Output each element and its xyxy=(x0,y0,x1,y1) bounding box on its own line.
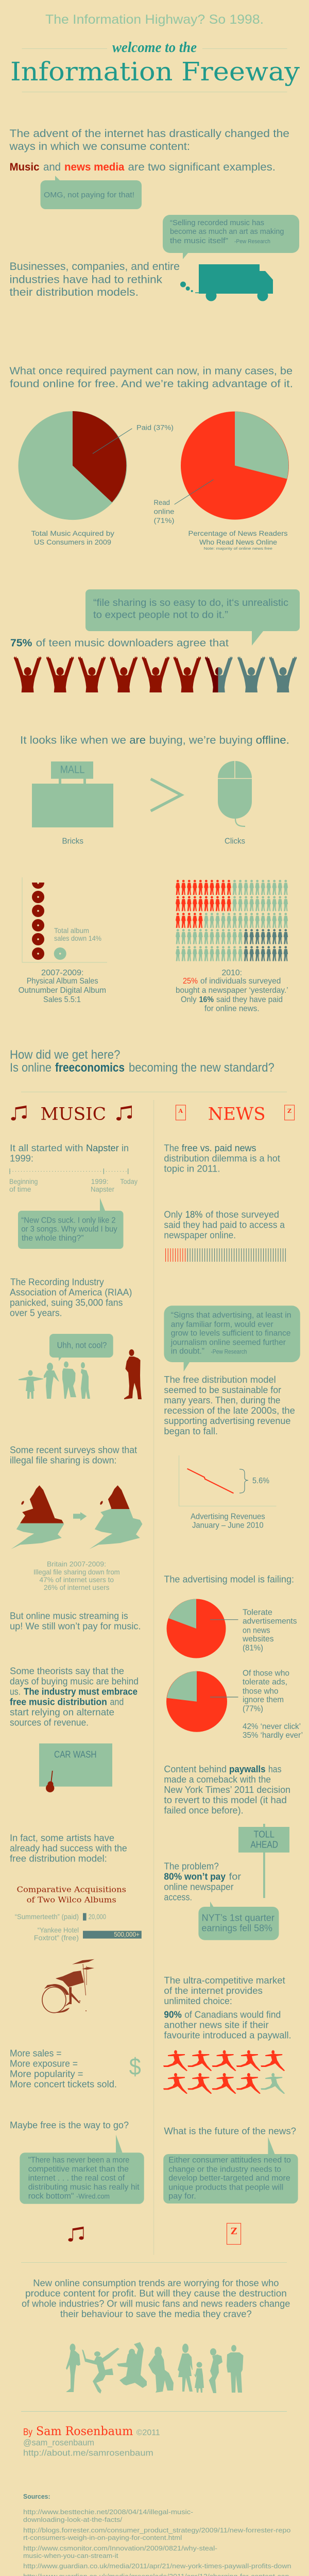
text: RIAA xyxy=(10,1277,132,1318)
icon: mouse (clicks) xyxy=(218,761,252,846)
title block: Information Freeway xyxy=(10,57,300,87)
chart: album sales discs: sales down 14% xyxy=(54,934,101,942)
pie chart: tolerate ads: websites xyxy=(242,1635,274,1643)
text: intro: are two significant examples. xyxy=(128,161,276,173)
text: intro xyxy=(9,128,289,173)
text: theorists: sources of revenue. xyxy=(10,1717,89,1727)
heading: MUSIC xyxy=(11,1104,132,1124)
text: streaming is up: up! We still won’t pay for music. xyxy=(10,1621,141,1631)
pictogram: 75% raised-hands people xyxy=(14,656,297,692)
text: 90% of Canadians: favourite introduced a paywall. xyxy=(164,2030,291,2041)
speech bubble: maybe free xyxy=(10,2120,144,2204)
text: streaming is up: But online music streaming is xyxy=(10,1611,128,1621)
text: file sharing is down: illegal file sharing is down: xyxy=(10,1455,116,1466)
text: more sales: More popularity = xyxy=(10,2069,83,2079)
sources list: http://www.besttechie.net/2008/04/14/illegal-music- xyxy=(23,2509,193,2516)
text: 75% of teens: 75% xyxy=(10,638,32,649)
pie chart: total music acquired: Paid (37%) xyxy=(136,423,174,431)
text: closing question: New online consumption trends are worrying for those who xyxy=(33,2278,279,2288)
kicker: The Information Highway: The Information Highway? So 1998. xyxy=(45,12,264,27)
text: more sales: More exposure = xyxy=(10,2059,78,2069)
text: only 18%: of those surveyed xyxy=(205,1209,279,1219)
caption: 2007-2009 album sales: Sales 5.5:1 xyxy=(43,995,81,1004)
text: artists free distribution xyxy=(10,1833,127,1863)
caption: 2010 newspaper survey: 16% xyxy=(199,995,214,1004)
timeline: beginning of time to today: Napster xyxy=(91,1185,114,1193)
text: Napster: It all started with xyxy=(10,1143,83,1153)
speech bubble: maybe free: distributing music has really hit xyxy=(28,2183,140,2192)
text: theorists: and xyxy=(110,1697,124,1707)
text: buying offline: It looks like when we xyxy=(20,735,126,746)
illustration: toll ahead sign: AHEAD xyxy=(250,1840,278,1850)
text: only 18%: Only xyxy=(164,1209,182,1219)
pie chart: ignore ads: 42% ‘never click’ xyxy=(243,1722,301,1731)
text: businesses: Businesses, companies, and entire xyxy=(9,261,180,273)
text: RIAA: The Recording Industry xyxy=(10,1277,104,1287)
text: paywalls: failed once before). xyxy=(164,1805,244,1816)
text: artists free distribution: free distribution model: xyxy=(10,1853,107,1863)
text: free vs paid: The xyxy=(164,1143,179,1153)
text: more sales: More sales = xyxy=(10,2048,61,2059)
text: intro: Music xyxy=(9,161,40,173)
text: Napster: 1999: xyxy=(10,1153,33,1163)
chart: album sales discs xyxy=(22,876,107,962)
speech bubble: NYT earnings: earnings fell 58% xyxy=(202,1923,272,1933)
illustration: toll ahead sign: TOLL xyxy=(253,1829,274,1840)
caption: 2010 newspaper survey: of individuals surveyed xyxy=(200,977,281,986)
icon: dollar sign: $ xyxy=(129,2053,141,2080)
icon: delivery truck xyxy=(180,264,273,301)
text: the problem: 80% won’t pay xyxy=(164,1871,226,1882)
icon: mall (bricks) xyxy=(32,761,113,846)
author credit: @sam_rosenbaum xyxy=(23,2438,94,2448)
pie chart: tolerate ads: advertisements xyxy=(243,1617,297,1626)
text: intro: and xyxy=(43,161,61,173)
text: ultra-competitive market xyxy=(164,1975,285,2006)
speech bubble: Selling recorded music: -Pew Research xyxy=(234,239,270,245)
speech bubble: Signs that advertising xyxy=(164,1306,300,1371)
text: 90% of Canadians: of Canadians would find xyxy=(184,2010,281,2020)
text: file sharing is down xyxy=(10,1445,137,1466)
timeline: beginning of time to today: 1999: xyxy=(91,1178,108,1185)
pie chart: ignore ads: ignore them xyxy=(243,1696,284,1704)
author credit: By xyxy=(23,2427,32,2437)
speech bubble: future of the news: What is the future of the news? xyxy=(164,2126,296,2137)
text: 90% of Canadians: 90% xyxy=(164,2010,182,2020)
pie chart: ignore ads: 35% ‘hardly ever’ xyxy=(243,1731,303,1740)
speech bubble: maybe free: competitive market than the xyxy=(28,2165,129,2174)
text: paywalls: to revert to this model (it had xyxy=(164,1795,287,1805)
speech bubble: not cool: Uhh, not cool? xyxy=(57,1341,107,1350)
caption: 2010 newspaper survey: for online news. xyxy=(204,1005,260,1013)
text: only 18%: newspaper online. xyxy=(164,1230,236,1240)
sources list: http://blogs.forrester.com/consumer_product_strategy/2009/11/new-forrester-repo xyxy=(23,2527,290,2534)
heading: NEWS xyxy=(176,1104,295,1124)
speech bubble: maybe free: internet . . . the real cost of xyxy=(28,2174,125,2183)
text: free distribution model: seemed to be sustainable for xyxy=(164,1385,281,1395)
text: free distribution model: supporting advertising revenue xyxy=(164,1416,290,1426)
speech bubble: future of the news: change or the industry needs to xyxy=(168,2165,281,2174)
heading: MUSIC: MUSIC xyxy=(40,1104,106,1124)
heading: NEWS: Z xyxy=(287,1108,291,1114)
heading: how did we get here: How did we get here? xyxy=(10,1048,120,1062)
caption: 2010 newspaper survey: 2010: xyxy=(221,969,242,977)
bar chart: comparative acquisitions of two Wilco albums: “Summerteeth” (paid) xyxy=(15,1912,79,1921)
caption: 2007-2009 album sales xyxy=(19,969,106,1004)
speech bubble: OMG: OMG, not paying for that! xyxy=(44,191,134,199)
bar chart: comparative acquisitions of two Wilco albums: Comparative Acquisitions xyxy=(16,1885,126,1894)
speech bubble: file sharing xyxy=(85,589,300,646)
speech bubble: Selling recorded music xyxy=(163,215,299,259)
text: buying offline xyxy=(20,735,289,746)
text: artists free distribution: already had success with the xyxy=(10,1843,127,1853)
text: only 18%: 18% xyxy=(185,1209,202,1219)
author credit xyxy=(23,2425,160,2458)
pie chart: news readers online: Read xyxy=(153,498,170,506)
speech bubble: Signs that advertising: journalism online seemed further xyxy=(170,1338,286,1347)
speech bubble: future of the news: pay for. xyxy=(168,2192,196,2201)
silhouette: RIAA man xyxy=(124,1349,142,1399)
pie chart: news readers online: (71%) xyxy=(153,516,174,524)
text: only 18%: said they had paid to access a xyxy=(164,1219,285,1230)
icon: Z box xyxy=(227,2223,241,2244)
speech bubble: Signs that advertising: “Signs that advertising, at least in xyxy=(171,1311,291,1319)
line chart: advertising revenues: January – June 2010 xyxy=(192,1521,264,1530)
heading: how did we get here xyxy=(10,1048,274,1075)
caption: 2010 newspaper survey: Only xyxy=(181,995,197,1004)
pie chart: ignore ads: (77%) xyxy=(243,1704,263,1713)
pictogram: running figures 90% xyxy=(163,2050,285,2094)
text: Napster: in xyxy=(122,1143,129,1153)
icon: greater-than sign xyxy=(151,779,181,811)
sources list: http://www.guardian.co.uk/media/2011/apr/21/new-york-times-paywall-profits-down xyxy=(23,2563,291,2570)
text: streaming is up xyxy=(10,1611,141,1631)
bar chart: comparative acquisitions of two Wilco albums: 500,000+ xyxy=(114,1930,140,1938)
pie chart: ignore ads: tolerate ads, xyxy=(243,1678,287,1687)
text: only 18% xyxy=(164,1209,285,1240)
title block: welcome to the xyxy=(112,39,197,56)
caption: 2010 newspaper survey xyxy=(176,969,288,1013)
text: free vs paid: free vs. paid news xyxy=(182,1143,256,1153)
caption: 2007-2009 album sales: 2007-2009: xyxy=(41,969,84,977)
text: ultra-competitive market: of the internet provides xyxy=(164,1986,263,1996)
maps: Britain file sharing: 26% of internet users xyxy=(44,1583,109,1591)
illustration: car wash sign with guitar: CAR WASH xyxy=(54,1750,97,1760)
speech bubble: future of the news xyxy=(163,2126,298,2204)
speech bubble: Selling recorded music: become as much an art as making xyxy=(170,228,284,236)
caption: 2010 newspaper survey: 25% xyxy=(183,977,198,986)
text: ultra-competitive market: unlimited choice: xyxy=(164,1996,232,2006)
pie chart: ignore ads: Of those who xyxy=(243,1669,289,1677)
text: theorists xyxy=(10,1666,139,1727)
pie chart: news readers online: Percentage of News Readers xyxy=(188,529,287,537)
icon: music note xyxy=(68,2227,84,2242)
pie chart: total music acquired: US Consumers in 2009 xyxy=(34,538,111,546)
text: free distribution model: recession of the late 2000s, the xyxy=(164,1405,295,1416)
text: the problem: The problem? xyxy=(164,1861,219,1871)
text: free distribution model: began to fall. xyxy=(164,1426,218,1436)
text: theorists: us. xyxy=(10,1686,21,1697)
text: intro: news media xyxy=(64,161,125,173)
text: businesses xyxy=(9,261,180,298)
pie chart: total music acquired: Total Music Acquired by xyxy=(31,529,114,537)
text: more sales xyxy=(10,2048,117,2090)
icon: mall (bricks): Bricks xyxy=(62,837,83,846)
pie chart: total music acquired xyxy=(19,411,174,546)
speech bubble: Selling recorded music: the music itself” xyxy=(170,237,228,245)
speech bubble: not cool xyxy=(49,1334,113,1361)
text: more sales: More concert tickets sold. xyxy=(10,2079,117,2090)
text: theorists: The industry must embrace xyxy=(24,1686,138,1697)
text: what once required payment xyxy=(9,365,293,389)
icon: mouse (clicks): Clicks xyxy=(225,837,245,846)
text: advertising model failing: The advertising model is failing: xyxy=(164,1574,294,1584)
text: 75% of teens: of teen music downloaders agree that xyxy=(36,638,229,649)
speech bubble: new CDs suck xyxy=(18,1198,124,1249)
pie chart: tolerate ads: on news xyxy=(243,1626,270,1635)
text: the problem: for xyxy=(229,1871,241,1882)
bar chart: comparative acquisitions of two Wilco albums: 20,000 xyxy=(89,1912,106,1921)
text: paywalls: New York Times’ 2011 decision xyxy=(164,1785,290,1795)
speech bubble: Signs that advertising: -Pew Research xyxy=(211,1348,247,1355)
timeline: beginning of time to today xyxy=(9,1168,138,1193)
text: intro: The advent of the internet has drastically changed the xyxy=(9,128,289,140)
pictogram: 100 people newspaper survey xyxy=(176,880,288,961)
speech bubble: future of the news: Either consumer attitudes need to xyxy=(168,2156,291,2165)
speech bubble: maybe free: rock bottom" xyxy=(28,2192,74,2201)
author credit: http://about.me/samrosenbaum xyxy=(23,2448,153,2458)
text: RIAA: over 5 years. xyxy=(10,1308,62,1318)
caption: 2007-2009 album sales: Outnumber Digital Album xyxy=(19,986,106,995)
caption: 2010 newspaper survey: said they have paid xyxy=(216,995,283,1004)
speech bubble: new CDs suck: or 3 songs. Why would I buy xyxy=(21,1225,117,1234)
text: theorists: days of buying music are behind xyxy=(10,1676,139,1686)
pie chart: tolerate ads: Tolerate xyxy=(243,1608,272,1617)
sources list: Sources: xyxy=(23,2493,50,2500)
chart: 18% paid barcode xyxy=(165,1248,286,1262)
text: RIAA: Association of America (RIAA) xyxy=(10,1287,132,1297)
text: paywalls: made a comeback with the xyxy=(164,1774,271,1785)
chart: album sales discs: Total album xyxy=(54,926,89,935)
author credit: ©2011 xyxy=(136,2429,160,2437)
text: RIAA: panicked, suing 35,000 fans xyxy=(10,1297,123,1308)
speech bubble: Signs that advertising: any familiar form, would ever xyxy=(171,1320,273,1329)
silhouettes: family of fans xyxy=(19,1361,90,1399)
bar chart: comparative acquisitions of two Wilco albums: “Yankee Hotel xyxy=(38,1926,79,1934)
text: 90% of Canadians: another news site if their xyxy=(164,2020,269,2030)
text: buying offline: buying, we’re buying xyxy=(149,735,253,746)
caption: 2007-2009 album sales: Physical Album Sales xyxy=(27,977,98,986)
line chart: advertising revenues xyxy=(179,1455,276,1530)
sources list: music-when-you-can-stream-it xyxy=(23,2552,118,2560)
text: businesses: their distribution models. xyxy=(9,286,139,298)
text: buying offline: offline. xyxy=(256,735,289,746)
maps: Britain file sharing: Illegal file sharing down from xyxy=(33,1568,120,1576)
text: the problem: online newspaper xyxy=(164,1882,234,1892)
title block xyxy=(10,39,300,92)
speech bubble: maybe free: "There has never been a more xyxy=(28,2156,129,2165)
sources list: http://www.csmonitor.com/Innovation/2009/0821/why-steal- xyxy=(23,2545,217,2552)
bar chart: comparative acquisitions of two Wilco albums: of Two Wilco Albums xyxy=(27,1895,116,1904)
sources list: downloading-look-at-the-facts/ xyxy=(23,2516,123,2523)
caption: 2010 newspaper survey: bought a newspaper ‘yesterday.’ xyxy=(176,986,288,995)
illustration: drum kit xyxy=(42,1959,94,2013)
speech bubble: Selling recorded music: “Selling recorded music has xyxy=(170,219,264,227)
speech bubble: file sharing: to expect people not to do it.” xyxy=(93,610,228,621)
text: theorists: Some theorists say that the xyxy=(10,1666,124,1676)
speech bubble: future of the news: develop better-targeted and more xyxy=(168,2174,290,2183)
heading: how did we get here: freeconomics xyxy=(55,1061,125,1075)
text: what once required payment: found online for free. And we’re taking advantage of it. xyxy=(10,378,293,389)
text: paywalls xyxy=(164,1764,290,1816)
maps: Britain file sharing xyxy=(11,1485,142,1591)
speech bubble: file sharing: “file sharing is so easy to do, it‘s unrealistic xyxy=(93,598,288,608)
text: free vs paid: distribution dilemma is a hot xyxy=(164,1153,280,1163)
heading: NEWS: A xyxy=(178,1108,183,1114)
illustration: car wash sign with guitar xyxy=(39,1743,112,1792)
speech bubble: future of the news: unique products that people will xyxy=(168,2183,283,2192)
text: paywalls: Content behind xyxy=(164,1764,227,1774)
line chart: advertising revenues: 5.6% xyxy=(252,1477,269,1485)
sources list: rt-consumers-weigh-in-on-paying-for-content.html xyxy=(23,2534,182,2541)
timeline: beginning of time to today: Beginning xyxy=(9,1178,38,1185)
text: the problem xyxy=(164,1861,241,1902)
text: closing question: their behaviour to save the media they crave? xyxy=(60,2309,252,2319)
text: what once required payment: What once required payment can now, in many cases, be xyxy=(9,365,293,377)
pie chart: tolerate ads: (81%) xyxy=(243,1643,263,1652)
text: free distribution model: The free distribution model xyxy=(164,1375,276,1385)
text: intro: ways in which we consume content: xyxy=(9,141,190,152)
text: Napster xyxy=(10,1143,129,1163)
text: 90% of Canadians xyxy=(164,2010,291,2041)
text: closing question: produce content for profit. But will they cause the destruction xyxy=(25,2288,287,2298)
bar chart: comparative acquisitions of two Wilco albums: Foxtrot” (free) xyxy=(34,1934,79,1942)
timeline: beginning of time to today: of time xyxy=(9,1185,31,1193)
pie chart: news readers online: online xyxy=(153,507,175,515)
text: artists free distribution: In fact, some artists have xyxy=(10,1833,114,1843)
text: closing question xyxy=(22,2278,290,2319)
text: paywalls: paywalls xyxy=(229,1764,266,1774)
text: Napster: Napster xyxy=(86,1143,119,1153)
speech bubble: OMG xyxy=(40,176,142,209)
pie chart: news readers online xyxy=(153,412,289,551)
icon: mall (bricks): MALL xyxy=(60,764,84,776)
text: closing question: of whole industries? Or will music fans and news readers change xyxy=(22,2298,290,2309)
silhouettes: people group xyxy=(66,2342,243,2394)
text: free distribution model: many years. Then, during the xyxy=(164,1395,280,1405)
text: businesses: industries have had to rethink xyxy=(9,274,163,285)
pie chart: ignore ads xyxy=(166,1669,303,1740)
pie chart: ignore ads: those who xyxy=(243,1687,279,1696)
text: paywalls: has xyxy=(268,1764,281,1774)
pie chart: news readers online: Who Read News Online xyxy=(199,538,277,546)
illustration: toll ahead sign xyxy=(238,1824,289,1898)
text: theorists: start relying on alternate xyxy=(10,1707,114,1717)
speech bubble: new CDs suck: “New CDs suck. I only like 2 xyxy=(21,1216,116,1225)
text: free vs paid: topic in 2011. xyxy=(164,1163,220,1174)
heading: how did we get here: Is online xyxy=(10,1061,52,1075)
text: the problem: access. xyxy=(164,1892,192,1902)
author credit: Sam Rosenbaum xyxy=(36,2425,133,2438)
icon: Z box: Z xyxy=(231,2227,237,2237)
maps: Britain file sharing: 47% of internet users to xyxy=(39,1575,114,1584)
speech bubble: new CDs suck: the whole thing?” xyxy=(22,1234,84,1243)
text: theorists: free music distribution xyxy=(10,1697,107,1707)
speech bubble: NYT earnings: NYT’s 1st quarter xyxy=(202,1912,274,1923)
speech bubble: Signs that advertising: in doubt.” xyxy=(171,1347,204,1355)
speech bubble: NYT earnings xyxy=(198,1902,279,1940)
heading: NEWS: NEWS xyxy=(208,1104,266,1124)
speech bubble: Signs that advertising: grow to levels sufficient to finance xyxy=(171,1329,290,1338)
bar chart: comparative acquisitions of two Wilco albums xyxy=(15,1885,142,1942)
text: ultra-competitive market: The ultra-competitive market xyxy=(164,1975,285,1986)
pie chart: news readers online: Note: majority of online news free xyxy=(204,546,272,551)
text: free distribution model xyxy=(164,1375,295,1436)
text: buying offline: are xyxy=(129,735,146,746)
maps: Britain file sharing: Britain 2007-2009: xyxy=(47,1560,106,1568)
heading: how did we get here: becoming the new standard? xyxy=(129,1061,274,1075)
line chart: advertising revenues: Advertising Revenues xyxy=(191,1512,265,1521)
timeline: beginning of time to today: Today xyxy=(120,1178,138,1185)
sources list xyxy=(23,2493,291,2576)
speech bubble: maybe free: Maybe free is the way to go? xyxy=(10,2120,129,2130)
text: free vs paid xyxy=(164,1143,280,1174)
pie chart: tolerate ads xyxy=(167,1599,297,1658)
text: file sharing is down: Some recent surveys show that xyxy=(10,1445,137,1455)
speech bubble: maybe free: -Wired.com xyxy=(76,2192,110,2200)
